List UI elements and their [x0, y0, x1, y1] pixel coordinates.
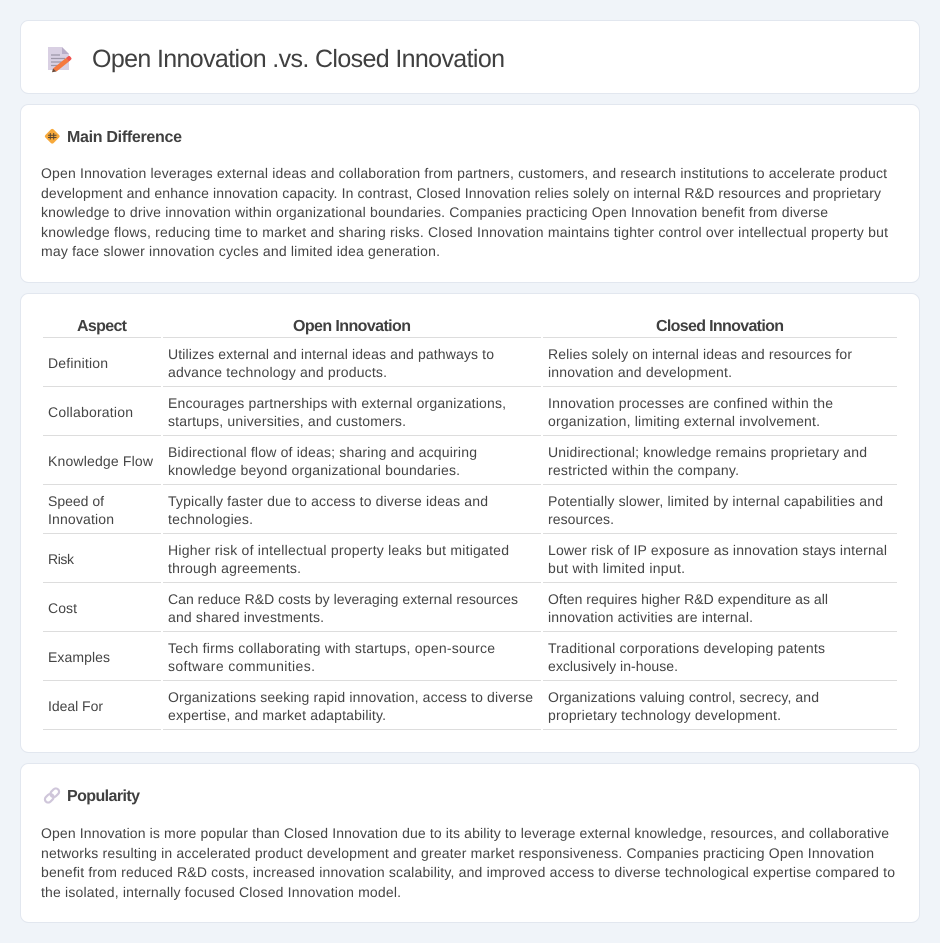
row: knowledge flow: restricted within the company.	[548, 462, 739, 478]
text: popularity body: benefit from reduced R&D costs, increased innovation scalability, and improved access to diverse technological expertise compared to	[41, 864, 895, 880]
row: cost: Can reduce R&D costs by leveraging external resources	[168, 591, 518, 607]
row: knowledge flow: Knowledge Flow	[48, 453, 154, 469]
row: definition: innovation and development.	[548, 364, 732, 380]
row: knowledge flow	[48, 444, 867, 478]
icon: link	[44, 787, 60, 804]
icon: orange diamond	[44, 128, 60, 144]
row: risk: through agreements.	[168, 560, 301, 576]
row: speed of innovation: Speed of	[48, 493, 104, 509]
row: ideal for: expertise, and market adaptability.	[168, 707, 386, 723]
row: risk: Lower risk of IP exposure as innovation stays internal	[548, 542, 887, 558]
row: speed of innovation: Potentially slower, limited by internal capabilities and	[548, 493, 883, 509]
row: definition: Utilizes external and internal ideas and pathways to	[168, 346, 494, 362]
row: risk: but with limited input.	[548, 560, 685, 576]
panel: main difference	[20, 104, 920, 282]
row: ideal for: Organizations valuing control, secrecy, and	[548, 689, 819, 705]
text: popularity body: Open Innovation is more popular than Closed Innovation due to its ability to leverage external knowledge, resources, and collaborative	[41, 825, 889, 841]
row: cost: Often requires higher R&D expenditure as all	[548, 591, 828, 607]
text: main difference body: may face slower innovation cycles and limited idea generation.	[41, 243, 440, 259]
text: main difference body	[41, 165, 888, 259]
row: examples: exclusively in-house.	[548, 658, 678, 674]
row: collaboration	[48, 395, 833, 429]
text: popularity body: the isolated, internally focused Closed Innovation model.	[41, 884, 401, 900]
row: risk	[48, 542, 887, 576]
row: definition	[48, 346, 852, 380]
text: popularity body	[41, 825, 895, 900]
text: main difference body: Open Innovation leverages external ideas and collaboration from partners, customers, and research institutions to accelerate product	[41, 165, 887, 181]
row: definition: advance technology and products.	[168, 364, 387, 380]
text: main difference body: development and enhance innovation capacity. In contrast, Closed Innovation relies solely on internal R&D resources and proprietary	[41, 185, 881, 201]
text: main difference body: knowledge flows, reducing time to market and sharing risks. Closed Innovation maintains tighter control over intellectual property but	[41, 224, 888, 240]
title: Open Innovation .vs. Closed Innovation	[92, 45, 505, 73]
row: ideal for	[48, 689, 819, 723]
row: definition: Relies solely on internal ideas and resources for	[548, 346, 852, 362]
row: knowledge flow: knowledge beyond organizational boundaries.	[168, 462, 460, 478]
panel: popularity	[20, 764, 920, 922]
row: cost	[48, 591, 828, 625]
row: collaboration: startups, universities, and customers.	[168, 413, 406, 429]
text: popularity body: networks resulting in accelerated product development and greater market responsiveness. Companies practicing Open Innovation	[41, 845, 874, 861]
table header row	[77, 318, 784, 335]
row: speed of innovation	[48, 493, 883, 527]
row: examples: Traditional corporations developing patents	[548, 640, 825, 656]
row: risk: Risk	[48, 551, 75, 567]
heading: popularity: Popularity	[67, 788, 140, 805]
row: speed of innovation: technologies.	[168, 511, 253, 527]
row: risk: Higher risk of intellectual property leaks but mitigated	[168, 542, 509, 558]
row: cost: innovation activities are internal.	[548, 609, 753, 625]
row: speed of innovation: Innovation	[48, 511, 114, 527]
row: speed of innovation: resources.	[548, 511, 614, 527]
heading: main difference: Main Difference	[67, 129, 182, 146]
panel: comparison table	[20, 294, 920, 752]
row: knowledge flow: Unidirectional; knowledge remains proprietary and	[548, 444, 867, 460]
table header row: Aspect	[77, 318, 128, 335]
row: examples: Tech firms collaborating with startups, open-source	[168, 640, 495, 656]
row: ideal for: proprietary technology development.	[548, 707, 781, 723]
table header row: Open Innovation	[293, 318, 411, 335]
row: knowledge flow: Bidirectional flow of ideas; sharing and acquiring	[168, 444, 477, 460]
row: collaboration: Innovation processes are confined within the	[548, 395, 833, 411]
row: definition: Definition	[48, 355, 108, 371]
row: examples: software communities.	[168, 658, 315, 674]
row: examples: Examples	[48, 649, 110, 665]
row: collaboration: Collaboration	[48, 404, 133, 420]
row: collaboration: organization, limiting external involvement.	[548, 413, 820, 429]
text: main difference body: knowledge to drive innovation within organizational boundaries. Companies practicing Open Innovation benefit from diverse	[41, 204, 828, 220]
panel: title header	[20, 20, 920, 94]
row: ideal for: Ideal For	[48, 698, 103, 714]
row: cost: and shared investments.	[168, 609, 324, 625]
icon: memo with pencil	[48, 47, 71, 72]
row: collaboration: Encourages partnerships with external organizations,	[168, 395, 506, 411]
row: ideal for: Organizations seeking rapid innovation, access to diverse	[168, 689, 533, 705]
row: cost: Cost	[48, 600, 77, 616]
row: examples	[48, 640, 825, 674]
table header row: Closed Innovation	[656, 318, 784, 335]
row: speed of innovation: Typically faster due to access to diverse ideas and	[168, 493, 488, 509]
